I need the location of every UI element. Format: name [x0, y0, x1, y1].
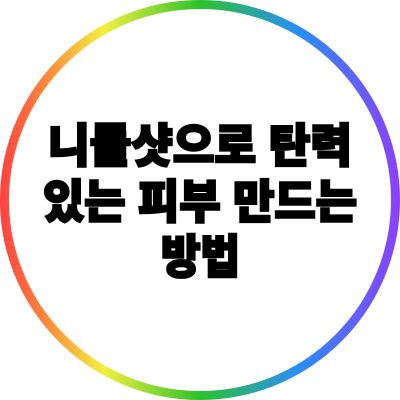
title line 2: 있는 피부 만드는 [43, 176, 357, 228]
title line 3: 방법 [161, 231, 240, 283]
title [43, 120, 357, 283]
title line 1: 니들샷으로 탄력 [48, 120, 352, 172]
